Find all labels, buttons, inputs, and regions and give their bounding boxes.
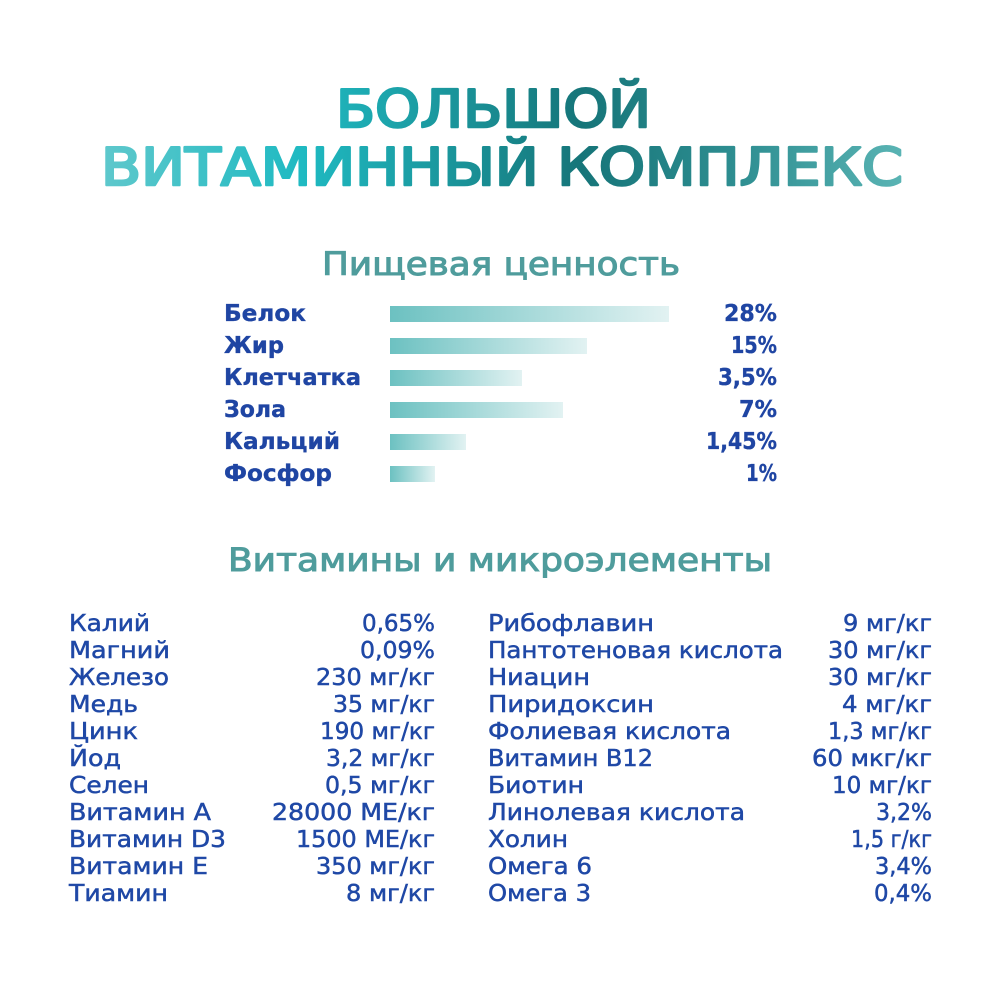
list: right column: 60 мкг/кг [812,746,932,772]
list: left column: 3,2 мг/кг [326,746,435,772]
list: right column: 1,3 мг/кг [828,719,932,745]
list: left column: Калий [69,611,150,637]
list: left column: 190 мг/кг [320,719,435,745]
list: left column: Тиамин [68,881,168,907]
row: phosphorus [224,461,777,487]
list: left column: Селен [69,773,149,799]
list: left column: 8 мг/кг [346,881,435,907]
list: left column: 35 мг/кг [333,692,435,718]
list: left column: 0,5 мг/кг [325,773,435,799]
list: left column: 230 мг/кг [316,665,435,691]
list: right column: 10 мг/кг [832,773,932,799]
list: left column: Витамин А [69,800,211,826]
row: fiber [224,365,777,391]
row: protein: 28% [724,301,777,327]
title: ВИТАМИННЫЙ КОМПЛЕКС [101,137,903,198]
row: calcium: Кальций [224,429,340,455]
list: right column [488,611,932,907]
bar chart: nutritional value [224,301,777,487]
row: phosphorus: 1% [746,461,777,487]
row: fat: 15% [731,333,777,359]
list: left column: Цинк [69,719,138,745]
list: right column: 3,2% [876,800,932,826]
list: right column: Витамин B12 [488,746,653,772]
list: right column: Холин [488,827,568,853]
list: right column: Пиридоксин [488,692,654,718]
row: fiber: Клетчатка [224,365,361,391]
list: right column: 0,4% [874,881,932,907]
row: ash [224,397,777,423]
row: protein: Белок [224,301,306,327]
title: БОЛЬШОЙ [336,79,651,140]
row: ash: 7% [739,397,777,423]
heading: nutritional value: Пищевая ценность [322,245,680,283]
heading: vitamins and minerals: Витамины и микроэлементы [228,541,772,579]
list: right column: Линолевая кислота [488,800,745,826]
list: left column: Витамин Е [69,854,208,880]
list: left column: 28000 МЕ/кг [272,800,435,826]
list: right column: Рибофлавин [488,611,654,637]
list: right column: Фолиевая кислота [488,719,731,745]
list: right column: Пантотеновая кислота [488,638,783,664]
list: right column: 4 мг/кг [842,692,932,718]
list: left column: 1500 МЕ/кг [296,827,435,853]
list: right column: 9 мг/кг [843,611,932,637]
row: fiber: 3,5% [718,365,777,391]
list: left column: 350 мг/кг [316,854,435,880]
list: left column: Магний [69,638,170,664]
list: right column: 3,4% [875,854,932,880]
list: left column: Йод [69,744,121,772]
list: right column: 30 мг/кг [828,638,932,664]
list: left column: Железо [69,665,169,691]
list: left column [68,611,435,907]
title [101,79,903,198]
list: right column: Биотин [488,773,584,799]
row: fat [224,333,777,359]
row: fat: Жир [224,333,284,359]
list: right column: 1,5 г/кг [851,827,932,853]
list: right column: Омега 3 [488,881,591,907]
list: left column: 0,65% [362,611,435,637]
row: calcium: 1,45% [706,429,777,455]
list: left column: Витамин D3 [69,827,226,853]
row: phosphorus: Фосфор [224,461,332,487]
list: left column: 0,09% [360,638,435,664]
list: right column: Омега 6 [488,854,592,880]
list: right column: Ниацин [488,665,590,691]
row: calcium [224,429,777,455]
row: protein [224,301,777,327]
list: left column: Медь [69,692,138,718]
row: ash: Зола [224,397,286,423]
list: right column: 30 мг/кг [828,665,932,691]
